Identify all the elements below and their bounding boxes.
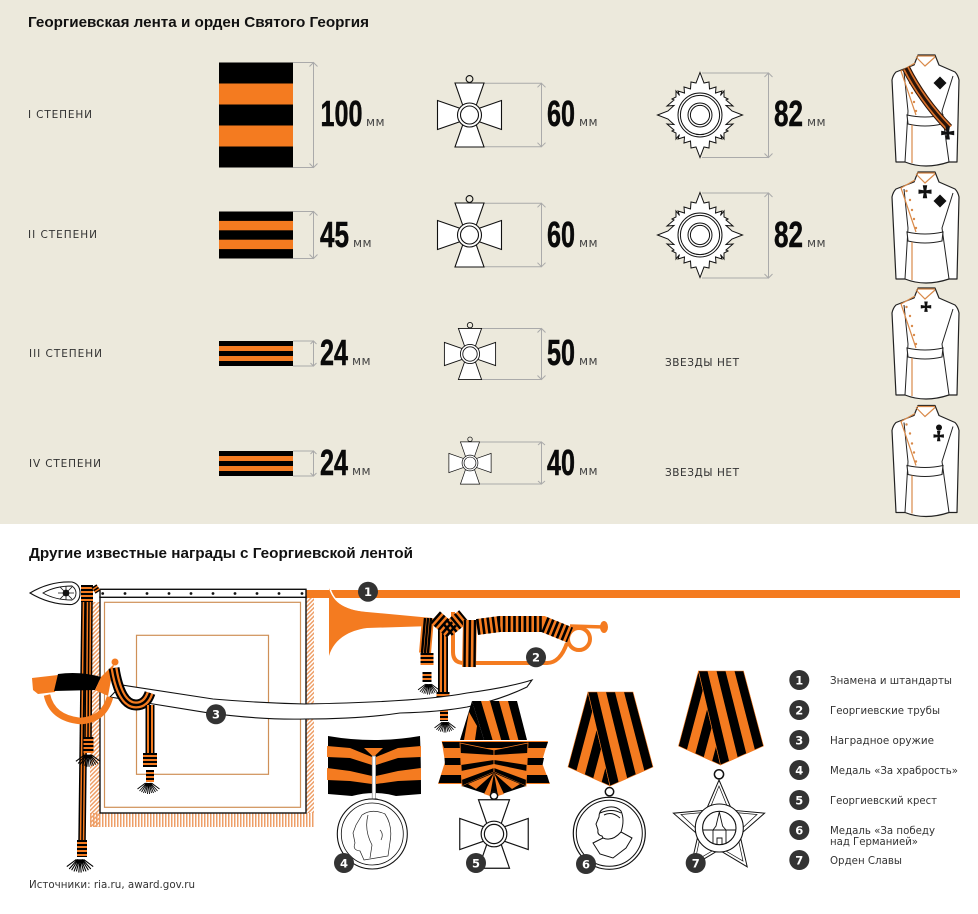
badge 4 xyxy=(334,853,354,873)
cross: II degree, 60 mm: 60 xyxy=(547,214,575,255)
badge 7: 7 xyxy=(692,856,700,870)
badge 2 xyxy=(526,647,546,667)
badge 3 xyxy=(206,704,226,724)
panel: George ribbon and order background xyxy=(0,0,978,524)
medal 4 portrait xyxy=(353,811,391,860)
badge 5: 5 xyxy=(472,856,480,870)
cross: II degree, 60 mm: мм xyxy=(579,236,598,250)
note: no star, III degree: ЗВЕЗДЫ НЕТ xyxy=(665,357,740,369)
ribbon: 45 mm: мм xyxy=(353,236,372,250)
star: I degree, 82 mm: 82 xyxy=(774,93,803,134)
ribbon: 24 mm, IV degree: мм xyxy=(352,464,371,478)
flag pole xyxy=(306,590,960,598)
note: no star, IV degree: ЗВЕЗДЫ НЕТ xyxy=(665,467,740,479)
cross: III degree, 50 mm: мм xyxy=(579,354,598,368)
legend item 2: Георгиевские трубы xyxy=(830,704,940,717)
jacket: I degree xyxy=(892,55,959,166)
legend item 7: Орден Славы xyxy=(830,854,902,867)
legend item 6: 6 xyxy=(795,823,803,837)
legend item 3: Наградное оружие xyxy=(830,734,934,747)
star: II degree, 82 mm: 82 xyxy=(774,214,803,255)
ribbon: 100 mm: мм xyxy=(366,115,385,129)
badge 6: 6 xyxy=(582,857,590,871)
badge 5 xyxy=(466,853,486,873)
legend item 7 xyxy=(789,850,902,870)
legend item 1: Знамена и штандарты xyxy=(830,674,952,687)
badge 1: 1 xyxy=(364,585,372,599)
star: II degree, 82 mm: мм xyxy=(807,236,826,250)
medal 6 portrait xyxy=(593,807,632,858)
ribbon: 24 mm, III degree: 24 xyxy=(320,332,348,373)
cross: IV degree, 40 mm: 40 xyxy=(547,442,575,483)
legend item 3: 3 xyxy=(795,733,803,747)
star: I degree, 82 mm xyxy=(658,72,826,158)
badge 4: 4 xyxy=(340,856,348,870)
legend item 6: Медаль «За победу xyxy=(830,824,935,837)
badge 3: 3 xyxy=(212,708,220,722)
legend item 3 xyxy=(789,730,934,750)
cross: I degree, 60 mm xyxy=(438,76,598,147)
medal: George Cross with bow xyxy=(438,701,550,868)
ribbon: 24 mm, IV degree xyxy=(219,442,371,483)
ribbon: 100 mm: 100 xyxy=(320,93,362,134)
legend item 4: 4 xyxy=(795,763,803,777)
jacket: II degree xyxy=(892,172,959,283)
legend item 2 xyxy=(789,700,940,720)
cross: IV degree, 40 mm: мм xyxy=(579,464,598,478)
cross: III degree, 50 mm: 50 xyxy=(547,332,575,373)
legend item 4 xyxy=(789,760,958,780)
legend item 5: 5 xyxy=(795,793,803,807)
cross: II degree, 60 mm xyxy=(438,196,598,267)
badge 6 xyxy=(576,854,596,874)
ribbon: 45 mm: 45 xyxy=(320,214,349,255)
title: Георгиевская лента и орден Святого Георгия xyxy=(28,14,369,31)
legend item 6: над Германией» xyxy=(830,835,918,848)
ribbon: 100 mm xyxy=(219,62,385,168)
legend xyxy=(789,670,958,870)
legend item 6 xyxy=(789,820,935,848)
jacket: IV degree xyxy=(892,406,959,516)
jacket: III degree xyxy=(892,288,959,399)
row label: IV degree: IV СТЕПЕНИ xyxy=(29,458,102,470)
section heading: other awards: Другие известные награды с Георгиевской лентой xyxy=(29,545,413,562)
row label: II degree: II СТЕПЕНИ xyxy=(28,229,98,241)
badge 7 xyxy=(686,853,706,873)
cross: I degree, 60 mm: мм xyxy=(579,115,598,129)
legend item 7: 7 xyxy=(795,853,803,867)
star: II degree, 82 mm xyxy=(658,192,826,278)
ribbon: 45 mm xyxy=(219,212,372,258)
medal: for bravery xyxy=(327,736,421,869)
row label: I degree: I СТЕПЕНИ xyxy=(28,109,93,121)
legend item 4: Медаль «За храбрость» xyxy=(830,764,958,777)
legend item 1: 1 xyxy=(795,673,803,687)
legend item 5: Георгиевский крест xyxy=(830,794,938,807)
legend item 5 xyxy=(789,790,938,810)
spear finial xyxy=(30,582,80,605)
legend item 2: 2 xyxy=(795,703,803,717)
badge 2: 2 xyxy=(532,651,540,665)
saber xyxy=(32,658,532,721)
saber ribbon xyxy=(114,668,160,794)
banner with ribbons xyxy=(90,589,314,827)
cross: I degree, 60 mm: 60 xyxy=(547,93,575,134)
cross: III degree, 50 mm xyxy=(444,322,598,380)
trumpet ribbon wrap xyxy=(418,616,570,733)
cross: IV degree, 40 mm xyxy=(449,437,598,484)
banner ribbon tails xyxy=(67,585,100,873)
badge 1 xyxy=(358,582,378,602)
ribbon: 24 mm, III degree: мм xyxy=(352,354,371,368)
legend item 1 xyxy=(789,670,952,690)
star: I degree, 82 mm: мм xyxy=(807,115,826,129)
sources: Источники: ria.ru, award.gov.ru xyxy=(29,878,195,891)
order of glory xyxy=(673,671,765,867)
row label: III degree: III СТЕПЕНИ xyxy=(29,348,103,360)
trumpet xyxy=(329,585,608,663)
ribbon: 24 mm, IV degree: 24 xyxy=(320,442,348,483)
medal: victory over Germany xyxy=(568,692,653,869)
ribbon: 24 mm, III degree xyxy=(219,332,371,373)
